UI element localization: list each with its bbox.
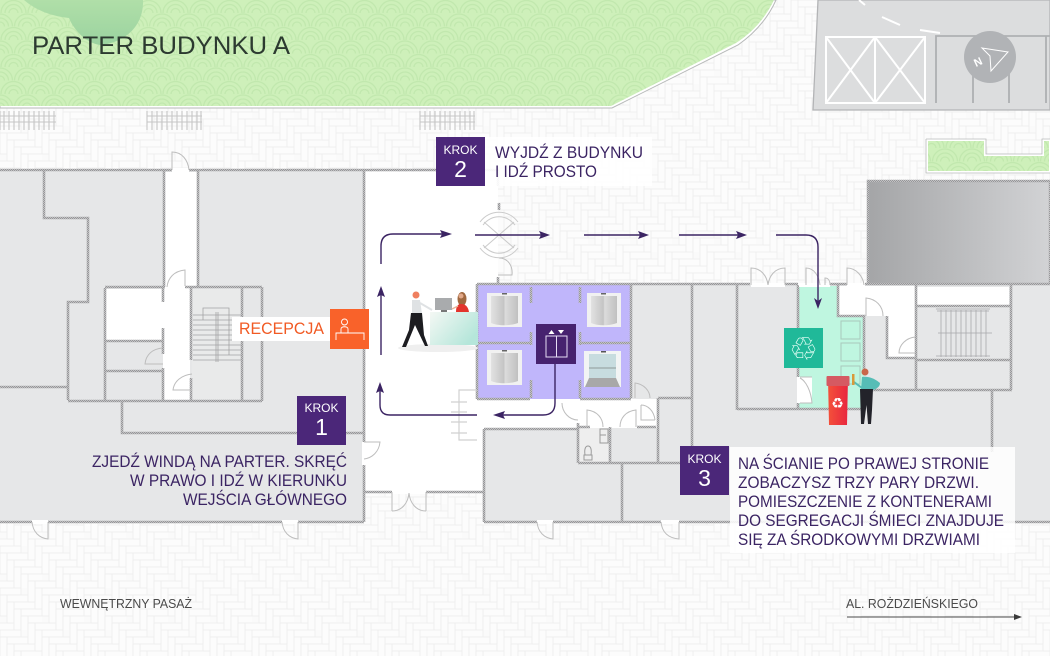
- step 1 text: W PRAWO I IDŹ W KIERUNKU: [130, 471, 347, 490]
- step 3 badge: KROK: [687, 452, 722, 466]
- recepcja label: RECEPCJA: [239, 320, 324, 338]
- recycling room door: [797, 377, 812, 403]
- step 3 text: [738, 454, 1004, 549]
- receptionist: [452, 292, 469, 312]
- step 2 badge: [436, 137, 485, 186]
- wall shrub line 1: [0, 111, 475, 130]
- step 1 badge: KROK: [304, 401, 339, 415]
- elevator car: open glass: [584, 351, 621, 387]
- step 3 text: SIĘ ZA ŚRODKOWYMI DRZWIAMI: [738, 530, 980, 549]
- recepcja label: [232, 309, 369, 349]
- step 1 text: WEJŚCIA GŁÓWNEGO: [183, 490, 347, 509]
- street label with arrow: AL. ROŻDZIEŃSKIEGO: [846, 596, 978, 611]
- parking bay lines: [936, 36, 1050, 103]
- step 3 text: DO SEGREGACJI ŚMIECI ZNAJDUJE: [738, 511, 1004, 530]
- elevator car: bottom left: [487, 350, 522, 385]
- right white corridor: [838, 286, 915, 358]
- route arrows: [376, 230, 822, 419]
- north compass: [964, 31, 1016, 83]
- step 2 callout: [436, 137, 652, 186]
- recycling bin: [826, 376, 850, 425]
- north compass: N: [972, 55, 985, 70]
- step 1 text: [92, 452, 347, 509]
- step 3 badge: 3: [698, 465, 711, 491]
- elevator car: top left: [487, 293, 522, 327]
- left stairwell floor: [192, 289, 242, 400]
- step 2 badge: KROK: [443, 143, 478, 157]
- recycling room cabinets: [841, 321, 860, 384]
- title: PARTER BUDYNKU A: [32, 32, 290, 60]
- tree canopy: [24, 0, 143, 45]
- door openings: [32, 168, 865, 524]
- step 3 text: NA ŚCIANIE PO PRAWEJ STRONIE: [738, 454, 989, 473]
- elevator car: top right: [587, 293, 621, 327]
- revolving door: [480, 212, 518, 258]
- right staircase: [936, 309, 992, 357]
- recycling icon: [784, 328, 823, 368]
- monitor: [435, 298, 452, 312]
- street label with arrow: [846, 596, 1022, 620]
- lawn: [0, 0, 776, 108]
- parking dashes: [859, 0, 940, 33]
- step 3 callout: [680, 446, 1015, 553]
- recycling room: [798, 286, 864, 408]
- passage label: WEWNĘTRZNY PASAŻ: [60, 597, 192, 611]
- reception icon: [330, 309, 369, 349]
- step 1 badge: 1: [315, 414, 328, 440]
- walls: [0, 170, 1050, 522]
- bin symbol: ♻: [831, 396, 844, 412]
- doors: [32, 152, 915, 539]
- step 3 badge: [680, 446, 729, 495]
- parking: [813, 0, 1050, 110]
- visitor: [402, 292, 432, 347]
- reception scene: [398, 292, 478, 352]
- toilet fixtures: [584, 429, 608, 460]
- left corridor: [106, 172, 197, 400]
- left staircase: [193, 308, 241, 362]
- step 2 text: I IDŹ PROSTO: [495, 162, 597, 181]
- step 3 text: ZOBACZYSZ TRZY PARY DRZWI.: [738, 474, 979, 492]
- elevator hall: [477, 285, 631, 399]
- toilet: [579, 428, 610, 463]
- floor shadow: [398, 344, 478, 352]
- dark outbuilding: [868, 181, 1050, 285]
- planter: [926, 139, 1050, 173]
- toilet bowl: [584, 446, 592, 460]
- arrowheads: [376, 230, 822, 419]
- building floor areas: [0, 170, 1050, 522]
- step 1 text: ZJEDŹ WINDĄ NA PARTER. SKRĘĆ: [92, 452, 347, 471]
- step 2 badge: 2: [454, 156, 467, 182]
- step 2 text: [495, 143, 643, 181]
- step 2 text: WYJDŹ Z BUDYNKU: [495, 143, 643, 162]
- ramp steps: [451, 390, 477, 440]
- lobby: [366, 172, 658, 492]
- hatched parking bays: [826, 37, 925, 103]
- man with bottle: [852, 368, 880, 424]
- desk: [430, 312, 478, 345]
- recycling icon: ♲: [789, 330, 818, 368]
- elevator icon: [536, 324, 576, 364]
- step 3 text: POMIESZCZENIE Z KONTENERAMI: [738, 493, 992, 511]
- step 1 badge: [297, 396, 346, 445]
